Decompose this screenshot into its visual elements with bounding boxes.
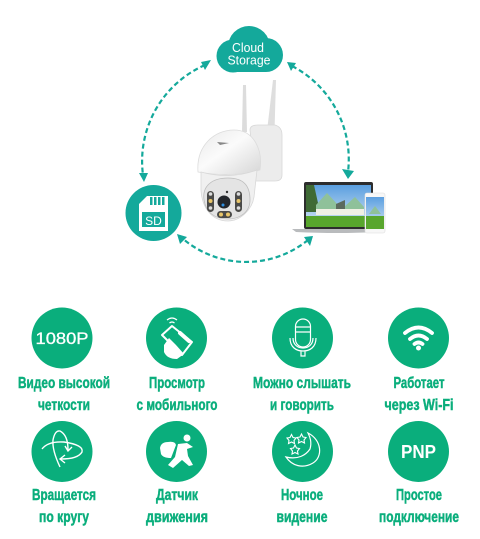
- feature: motion sensor: Датчик: [156, 487, 199, 504]
- arrow: SD to cloud: [139, 60, 211, 182]
- feature: PnP: [379, 421, 459, 526]
- security camera: [198, 80, 282, 221]
- SD card icon: [126, 185, 182, 241]
- feature: mobile view: с мобильного: [136, 397, 218, 414]
- arrow: cloud to laptop: [287, 62, 354, 179]
- feature: motion sensor: [146, 421, 208, 526]
- feature: wi-fi: [384, 308, 454, 414]
- cloud storage icon: Cloud: [232, 40, 264, 55]
- cloud storage icon: Storage: [228, 52, 270, 68]
- feature: night vision: видение: [276, 509, 328, 526]
- feature: motion sensor: движения: [146, 509, 208, 526]
- feature: rotation: по кругу: [39, 509, 89, 526]
- feature: wi-fi: Работает: [394, 375, 445, 392]
- feature: 1080P: [18, 308, 110, 414]
- feature: PnP: Простое: [396, 487, 442, 504]
- feature: 1080P: 1080P: [36, 329, 88, 348]
- feature: rotation: [32, 421, 96, 526]
- cloud storage icon: [216, 26, 283, 72]
- SD card icon: SD: [145, 214, 162, 228]
- feature: night vision: Ночное: [281, 487, 323, 504]
- feature: PnP: PNP: [401, 441, 436, 462]
- feature: microphone: Можно слышать: [253, 375, 351, 392]
- arrow: laptop to SD: [177, 234, 313, 262]
- feature: wi-fi: через Wi-Fi: [384, 397, 454, 414]
- feature: 1080P: Видео высокой: [18, 375, 110, 392]
- feature: microphone: [253, 308, 351, 414]
- feature: night vision: [272, 421, 333, 526]
- feature: mobile view: [136, 308, 218, 414]
- feature: rotation: Вращается: [32, 487, 96, 504]
- feature: mobile view: Просмотр: [149, 375, 205, 392]
- feature: microphone: и говорить: [270, 397, 334, 414]
- feature: 1080P: четкости: [38, 397, 90, 414]
- laptop and phone: [292, 182, 385, 233]
